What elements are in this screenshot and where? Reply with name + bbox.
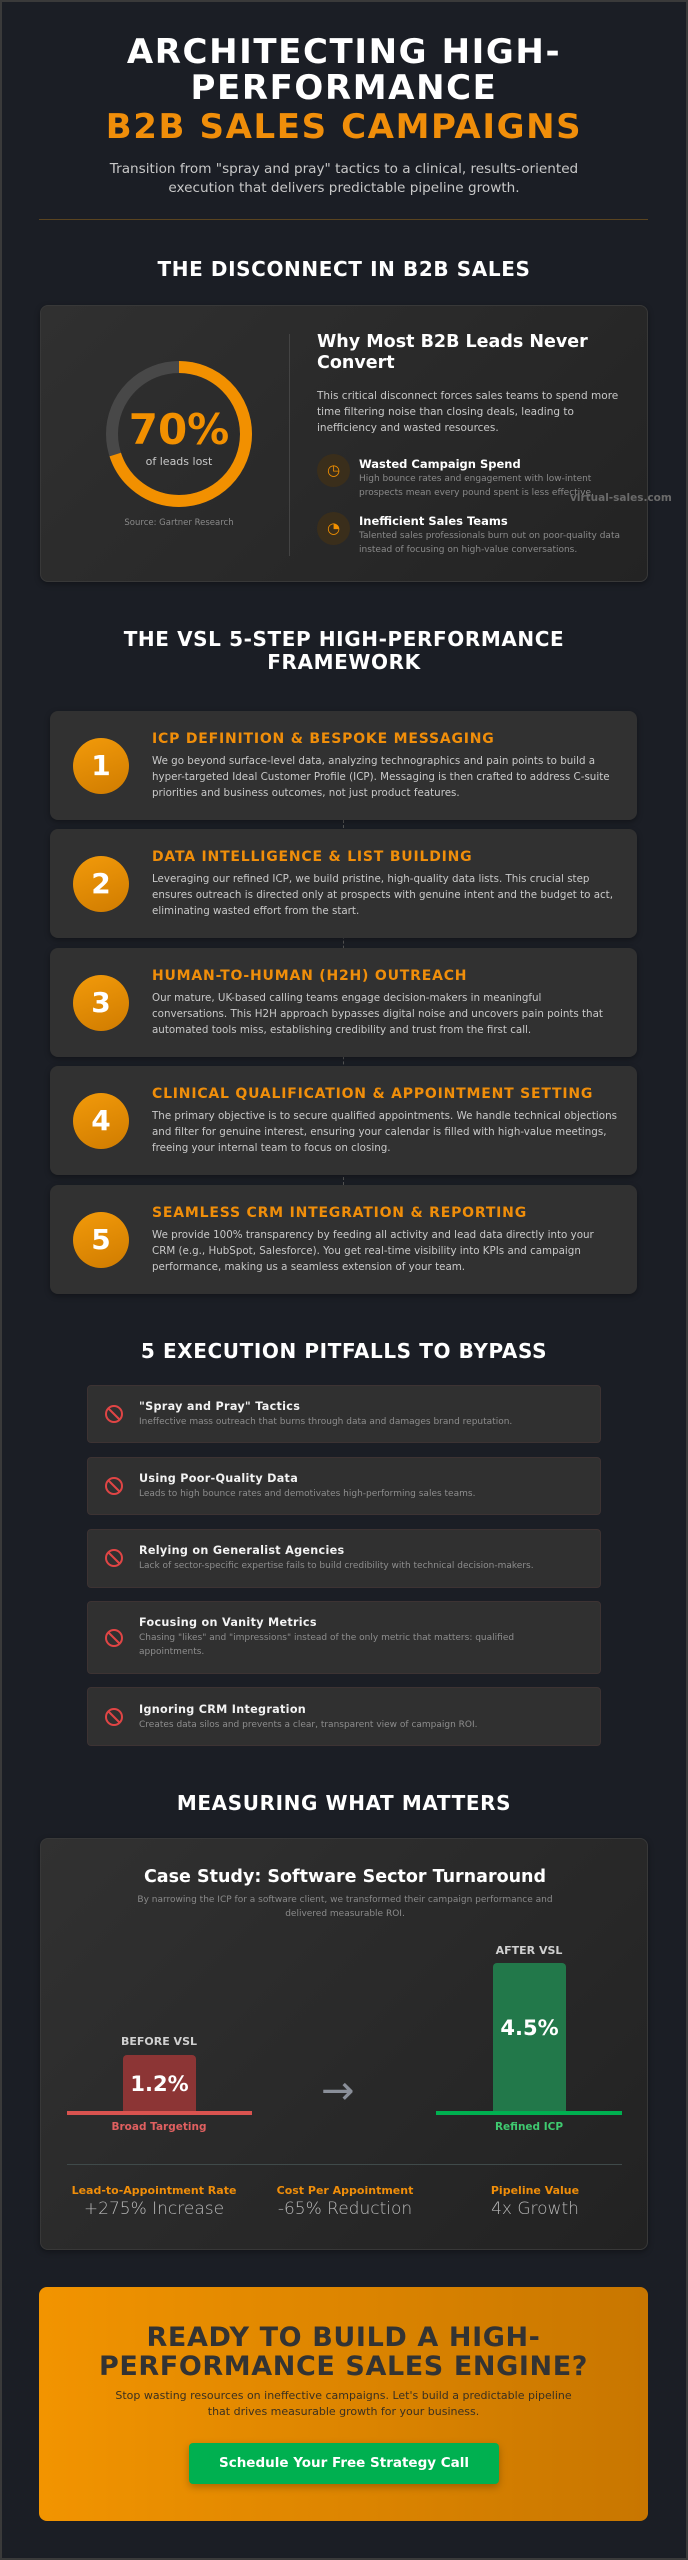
step 5: SEAMLESS CRM INTEGRATION & REPORTING	[152, 1205, 527, 1221]
item: inefficient teams	[317, 512, 620, 555]
step 3	[50, 948, 637, 1057]
step 1: We go beyond surface-level data, analyzing technographics and pain points to build a hyper-targeted Ideal Customer Profile (ICP). Messaging is then crafted to address C-suite priorities and business outcomes, not just product features.	[152, 755, 610, 799]
step 3: 3	[91, 986, 111, 1019]
panel: case study	[40, 1838, 648, 2250]
step 4: 4	[91, 1104, 111, 1137]
pitfall 1: Ineffective mass outreach that burns through data and damages brand reputation.	[139, 1417, 512, 1427]
pitfall 5: Creates data silos and prevents a clear, transparent view of campaign ROI.	[139, 1720, 478, 1730]
pitfall 5	[87, 1687, 601, 1746]
bar: after: 4.5%	[500, 2016, 559, 2040]
bar: before: BEFORE VSL	[121, 2035, 197, 2048]
pitfall 4	[87, 1601, 601, 1674]
heading: measuring: MEASURING WHAT MATTERS	[177, 1791, 511, 1815]
stats: +275% Increase	[84, 2199, 224, 2219]
donut chart	[106, 361, 252, 507]
bar: before: Broad Targeting	[112, 2121, 206, 2133]
pitfall 4: Chasing "likes" and "impressions" instead of the only metric that matters: qualified appointments.	[139, 1633, 514, 1657]
pitfall 2: Leads to high bounce rates and demotivates high-performing sales teams.	[139, 1489, 475, 1499]
stats	[72, 2184, 579, 2219]
subtitle: execution that delivers predictable pipeline growth.	[168, 180, 520, 196]
step 3: Our mature, UK-based calling teams engage decision-makers in meaningful conversations. This H2H approach bypasses digital noise and uncovers pain points that automated tools miss, establishing credibility and trust from the first call.	[152, 992, 603, 1036]
panel heading: Why Most B2B Leads Never	[317, 332, 588, 352]
item: wasted spend	[317, 454, 594, 498]
step 1: 1	[91, 749, 111, 782]
step 1: ICP DEFINITION & BESPOKE MESSAGING	[152, 731, 495, 747]
arrow: →	[321, 2068, 355, 2114]
step 5	[50, 1185, 637, 1294]
item: inefficient teams: Inefficient Sales Teams	[359, 514, 508, 528]
pitfall 1	[87, 1385, 601, 1443]
step 2: 2	[91, 867, 111, 900]
CTA panel: Stop wasting resources on ineffective campaigns. Let's build a predictable pipeline that drives measurable growth for your business.	[115, 2389, 572, 2418]
button: Schedule Your Free Strategy Call	[219, 2455, 469, 2471]
subtitle	[110, 161, 578, 196]
step 2	[50, 829, 637, 938]
pitfall 3: Relying on Generalist Agencies	[139, 1544, 344, 1557]
heading: framework: THE VSL 5-STEP HIGH-PERFORMANCE	[124, 627, 564, 651]
item: inefficient teams: Talented sales professionals burn out on poor-quality data instead of focusing on high-value conversations.	[359, 531, 620, 555]
panel: disconnect	[40, 305, 648, 582]
panel heading	[317, 332, 588, 373]
pitfall 1: "Spray and Pray" Tactics	[139, 1400, 300, 1413]
CTA panel: PERFORMANCE SALES ENGINE?	[99, 2351, 588, 2382]
pitfall 3: Lack of sector-specific expertise fails to build credibility with technical decision-makers.	[139, 1561, 534, 1571]
pitfall 2: Using Poor-Quality Data	[139, 1472, 298, 1485]
bar: before: 1.2%	[130, 2072, 189, 2096]
panel heading: Convert	[317, 353, 395, 373]
panel: case study: Case Study: Software Sector Turnaround	[144, 1867, 546, 1887]
step 1	[50, 711, 637, 820]
heading: disconnect: THE DISCONNECT IN B2B SALES	[158, 257, 530, 281]
step 5: We provide 100% transparency by feeding all activity and lead data directly into your CRM (e.g., HubSpot, Salesforce). You get real-time visibility into KPIs and campaign performance, making us a seamless extension of your team.	[152, 1229, 594, 1273]
stats: Cost Per Appointment	[277, 2184, 413, 2197]
pitfall 5: Ignoring CRM Integration	[139, 1703, 306, 1716]
heading: framework: FRAMEWORK	[267, 650, 421, 674]
stats: -65% Reduction	[278, 2199, 412, 2219]
step 4: CLINICAL QUALIFICATION & APPOINTMENT SETTING	[152, 1086, 593, 1102]
donut chart: of leads lost	[146, 455, 213, 468]
item: wasted spend: Wasted Campaign Spend	[359, 457, 521, 471]
pitfall 3	[87, 1529, 601, 1588]
stats: 4x Growth	[491, 2199, 579, 2219]
bar: after: AFTER VSL	[496, 1944, 562, 1957]
heading: pitfalls: 5 EXECUTION PITFALLS TO BYPASS	[141, 1339, 547, 1363]
donut chart: 70%	[129, 405, 229, 454]
stats: Pipeline Value	[491, 2184, 579, 2197]
bar: after: Refined ICP	[495, 2121, 563, 2133]
icon: coin: ◷	[327, 461, 340, 479]
icon: clock	[317, 512, 350, 545]
pitfall 2	[87, 1457, 601, 1515]
step 3: HUMAN-TO-HUMAN (H2H) OUTREACH	[152, 968, 467, 984]
title	[106, 32, 582, 147]
icon: prohibited	[105, 1405, 123, 1423]
step 5: 5	[91, 1223, 111, 1256]
CTA panel	[39, 2287, 648, 2521]
pitfall 4: Focusing on Vanity Metrics	[139, 1616, 317, 1629]
button	[189, 2443, 499, 2484]
panel body: This critical disconnect forces sales teams to spend more time filtering noise than closing deals, leading to inefficiency and wasted resources.	[317, 390, 618, 434]
title: PERFORMANCE	[190, 68, 498, 108]
bar: after	[436, 1944, 622, 2133]
panel: case study: By narrowing the ICP for a software client, we transformed their campaign performance and delivered measurable ROI.	[137, 1895, 553, 1919]
title: B2B SALES CAMPAIGNS	[106, 107, 582, 147]
subtitle: Transition from "spray and pray" tactics to a clinical, results-oriented	[110, 161, 578, 177]
CTA panel: READY TO BUILD A HIGH-	[147, 2322, 540, 2353]
source: Source: Gartner Research	[124, 518, 234, 528]
step 4: The primary objective is to secure qualified appointments. We handle technical objections and filter for genuine interest, ensuring your calendar is filled with high-value meetings, freeing your internal team to focus on closing.	[152, 1110, 617, 1154]
bar: before	[67, 2035, 252, 2133]
step 2: DATA INTELLIGENCE & LIST BUILDING	[152, 849, 472, 865]
icon: coin	[317, 454, 350, 487]
item: wasted spend: High bounce rates and engagement with low-intent prospects mean every pound spent is less effective.	[359, 474, 594, 498]
title: ARCHITECTING HIGH-	[127, 32, 561, 72]
watermark: virtual-sales.com	[570, 492, 672, 504]
stats: Lead-to-Appointment Rate	[72, 2184, 236, 2197]
heading: framework	[124, 627, 564, 674]
icon: clock: ◔	[327, 519, 340, 537]
step 2: Leveraging our refined ICP, we build pristine, high-quality data lists. This crucial step ensures outreach is directed only at prospects with genuine intent and the budget to act, eliminating wasted effort from the start.	[152, 873, 613, 917]
step 4	[50, 1066, 637, 1175]
